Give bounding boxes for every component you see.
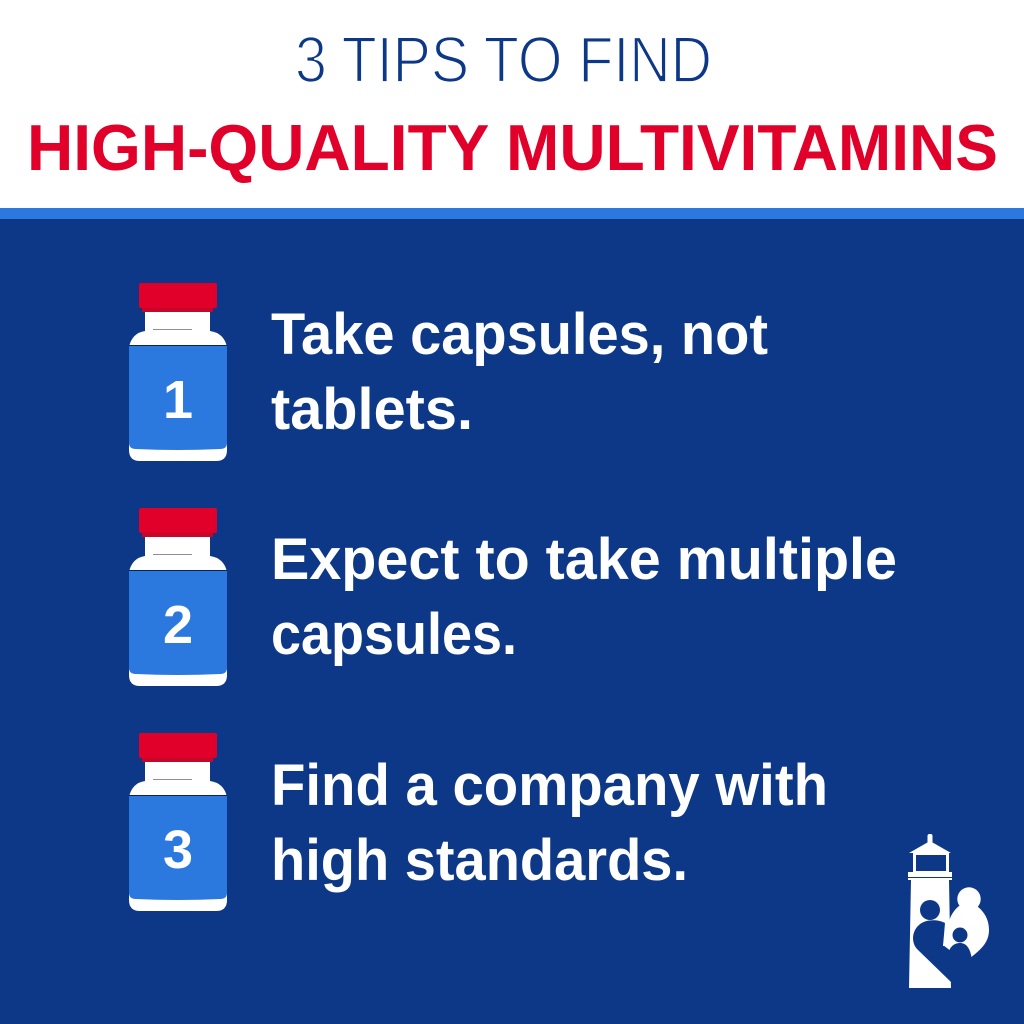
header divider <box>0 208 1024 219</box>
main panel <box>0 219 1024 1024</box>
tip 1 <box>129 283 768 461</box>
tip 3 <box>129 733 828 911</box>
icon: bottle 1 <box>129 283 227 461</box>
tip 2 text: capsules. <box>271 602 517 667</box>
tip 2 <box>129 508 897 686</box>
tip 3 text: Find a company with <box>271 753 828 818</box>
tip 3 text: high standards. <box>271 828 688 893</box>
icon: bottle 3 <box>129 733 227 911</box>
header band <box>0 0 1024 209</box>
title line 2: HIGH-QUALITY MULTIVITAMINS <box>27 111 998 184</box>
tip 1 text: tablets. <box>271 377 473 442</box>
icon: bottle 1: 1 <box>163 370 193 430</box>
tip 2 text: Expect to take multiple <box>271 527 897 592</box>
icon: bottle 2 <box>129 508 227 686</box>
icon: bottle 2: 2 <box>163 595 193 655</box>
tip 1 text: Take capsules, not <box>271 302 768 367</box>
icon: lighthouse logo <box>908 834 989 988</box>
icon: bottle 3: 3 <box>163 820 193 880</box>
title line 1: 3 TIPS TO FIND <box>295 23 712 96</box>
